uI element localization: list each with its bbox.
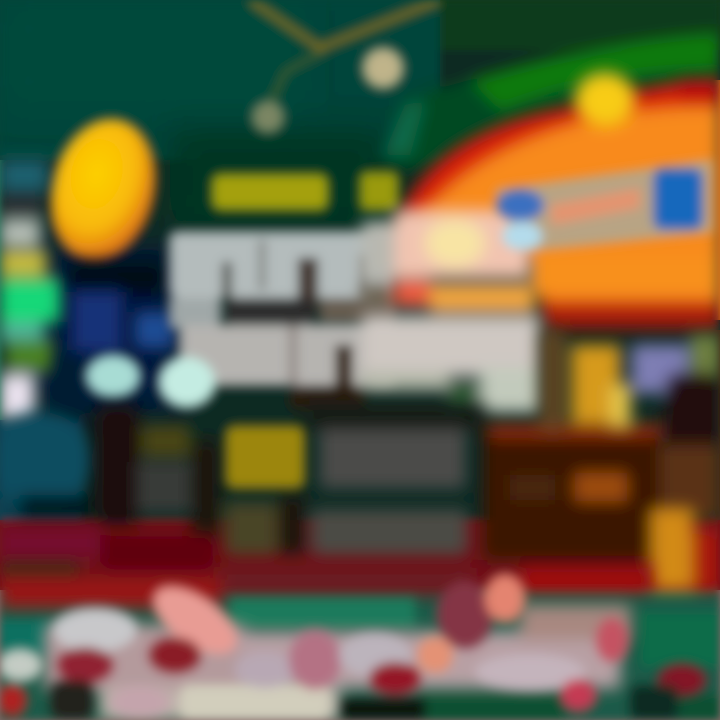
dome yellow lamp — [575, 73, 635, 127]
casino chips — [0, 573, 706, 720]
ceiling lights — [250, 0, 440, 133]
yellow heading — [212, 172, 398, 210]
info block: dark figures and grey rows — [95, 405, 485, 555]
green arc and teal wedge — [383, 32, 720, 170]
pale cyan blobs — [86, 355, 215, 407]
red carpet strip — [0, 528, 650, 608]
green table — [0, 598, 720, 720]
teal globe at left — [0, 412, 92, 517]
background: dark green ceiling — [0, 0, 390, 410]
dome sign — [495, 160, 712, 252]
orange dome with red rim — [400, 78, 720, 332]
blurred title lines — [170, 232, 395, 410]
glowing title right side — [362, 210, 540, 412]
casino chips mass — [45, 605, 630, 720]
yellow coin — [37, 109, 169, 271]
casino counter right — [483, 330, 720, 590]
dark and blue glow behind title — [55, 262, 173, 410]
left colourful panel — [0, 160, 60, 419]
yellow box — [226, 426, 304, 488]
